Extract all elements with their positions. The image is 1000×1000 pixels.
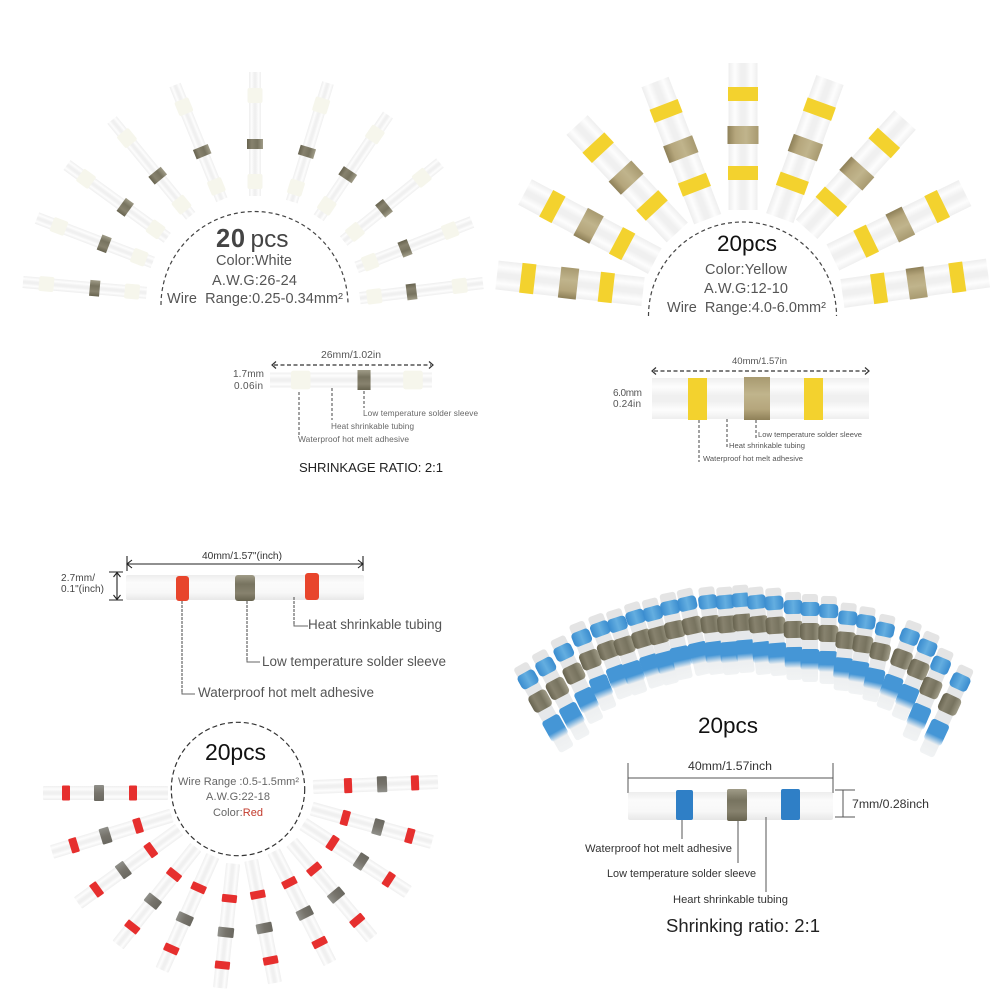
yellow connector diagram: Heat shrinkable tubing [729, 441, 805, 450]
blue connector diagram: 40mm/1.57inch [688, 759, 772, 773]
red connector diagram: 0.1"(inch) [61, 584, 104, 595]
fan of yellow connectors [495, 63, 990, 309]
white connector diagram: 1.7mm [233, 369, 264, 380]
red connector diagram: Waterproof hot melt adhesive [198, 685, 374, 700]
white connector diagram: Heat shrinkable tubing [331, 422, 414, 431]
yellow connector diagram: Waterproof hot melt adhesive [703, 454, 803, 463]
dashed semicircle with specs: A.W.G:12-10 [704, 281, 788, 297]
dashed circle with specs: Color:Red [213, 807, 263, 819]
white connector diagram: 26mm/1.02in [321, 350, 381, 361]
dashed semicircle with specs: 20 [216, 225, 245, 253]
yellow connector diagram: 0.24in [613, 399, 641, 410]
dashed semicircle with specs: Wire Range:0.25-0.34mm² [167, 291, 343, 307]
red connector diagram: 2.7mm/ [61, 573, 95, 584]
dashed circle with specs: Wire Range :0.5-1.5mm² [178, 776, 299, 788]
white connector diagram: 0.06in [234, 381, 263, 392]
dashed circle with specs: 20pcs [205, 739, 266, 765]
panel: blue connectors [511, 584, 976, 936]
dashed semicircle with specs: Color:Yellow [705, 262, 788, 278]
yellow connector diagram: 6.0mm [613, 388, 642, 399]
dashed semicircle with specs: Wire Range:4.0-6.0mm² [667, 300, 826, 316]
shrinking ratio heading: Shrinking ratio: 2:1 [666, 915, 820, 936]
white connector diagram: Low temperature solder sleeve [363, 409, 478, 418]
fan of red connectors [43, 774, 438, 989]
panel: white connectors [22, 72, 484, 475]
blue connector diagram: 7mm/0.28inch [852, 797, 929, 811]
blue connector diagram: Waterproof hot melt adhesive [585, 843, 732, 855]
quantity heading: 20pcs [698, 713, 758, 738]
blue connector diagram [585, 759, 929, 906]
red connector diagram: Heat shrinkable tubing [308, 617, 442, 632]
arc of blue connectors [511, 584, 976, 759]
yellow connector diagram: 40mm/1.57in [732, 356, 787, 367]
dashed circle with specs [171, 722, 305, 856]
dashed semicircle with specs [648, 222, 836, 316]
panel: yellow connectors [495, 63, 990, 463]
white connector diagram: Waterproof hot melt adhesive [298, 434, 409, 444]
yellow connector diagram [613, 356, 869, 463]
blue connector diagram: Heart shrinkable tubing [673, 894, 788, 906]
yellow connector diagram: Low temperature solder sleeve [758, 430, 862, 439]
red connector diagram [61, 551, 446, 700]
white connector diagram [233, 350, 478, 444]
dashed semicircle with specs: 20pcs [717, 231, 777, 256]
dashed semicircle with specs [161, 212, 348, 307]
dashed semicircle with specs: Color:White [216, 253, 292, 269]
dashed semicircle with specs: A.W.G:26-24 [212, 273, 297, 289]
blue connector diagram: Low temperature solder sleeve [607, 868, 756, 880]
fan of white connectors [22, 72, 484, 306]
red connector diagram: Low temperature solder sleeve [262, 654, 446, 669]
dashed semicircle with specs: pcs [250, 226, 288, 253]
dashed circle with specs: A.W.G:22-18 [206, 791, 270, 803]
panel: red connectors [43, 551, 446, 989]
red connector diagram: 40mm/1.57"(inch) [202, 551, 282, 562]
shrinkage ratio heading: SHRINKAGE RATIO: 2:1 [299, 460, 443, 475]
